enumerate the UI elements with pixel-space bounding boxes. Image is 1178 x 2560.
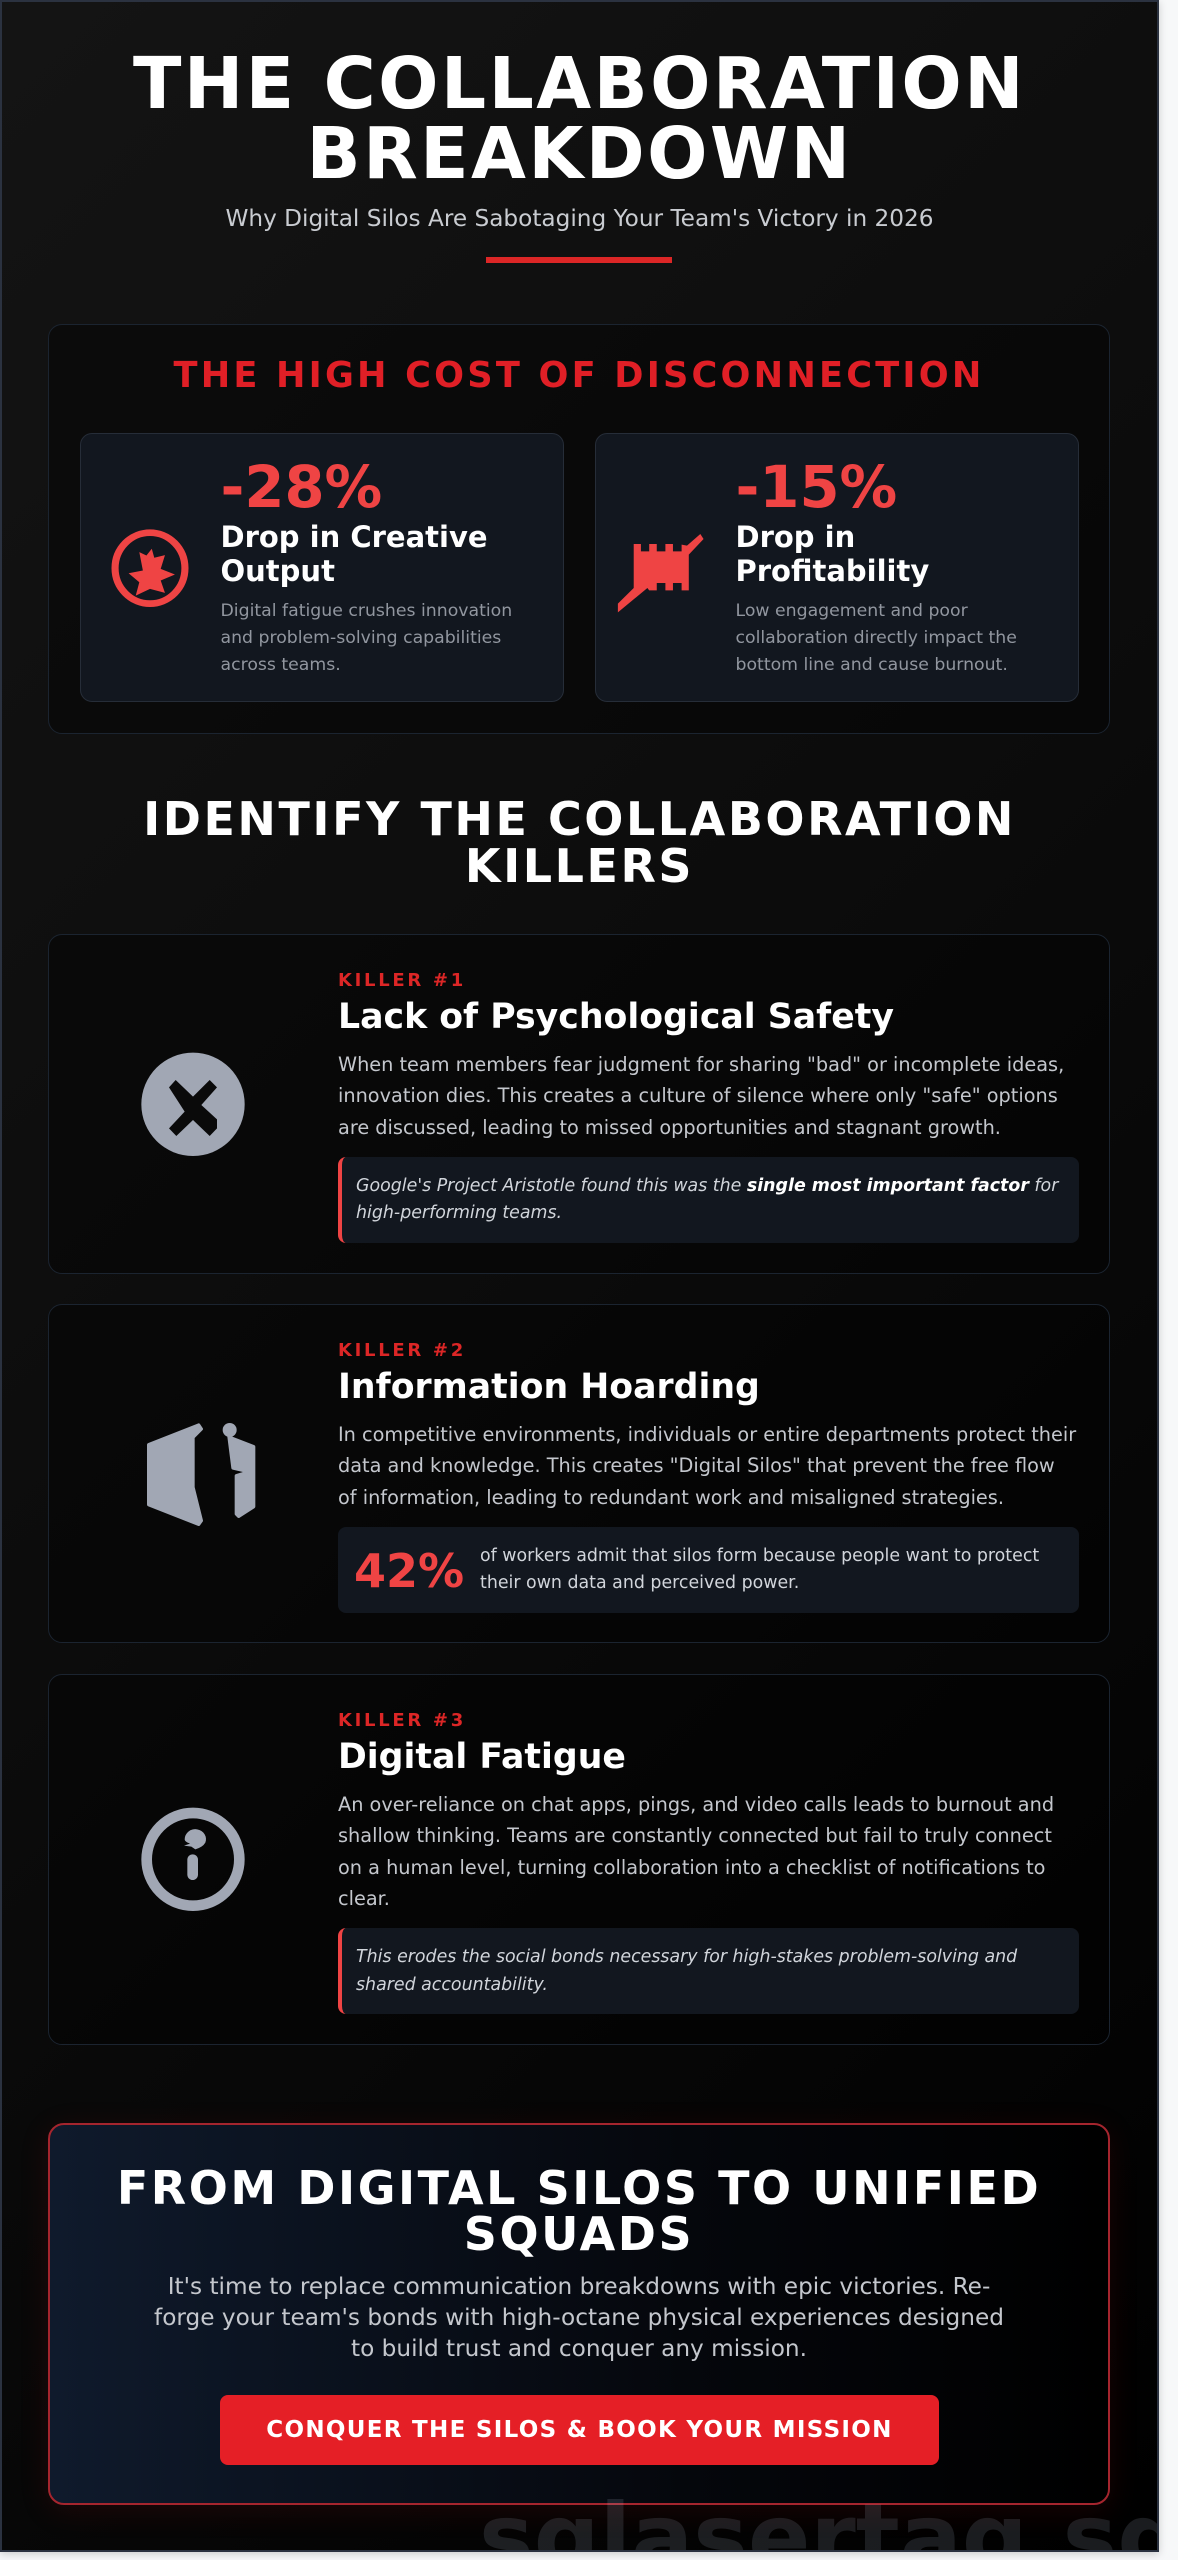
- section heading: [143, 792, 1016, 893]
- red accent bar: [486, 257, 672, 263]
- stat text: -28%: [220, 454, 382, 521]
- killer 1 text: [338, 970, 1079, 1243]
- stat text: [736, 454, 1017, 675]
- stat text: [220, 454, 512, 675]
- panel: killer 3: [48, 1674, 1110, 2045]
- stat card: profitability: [595, 433, 1079, 702]
- quote callout: high-performing teams.: [356, 1203, 562, 1223]
- cta button: CONQUER THE SILOS & BOOK YOUR MISSION: [266, 2417, 893, 2443]
- call to action panel: [48, 2123, 1110, 2505]
- killer 2 text: data and knowledge. This creates "Digital Silos" that prevent the free flow: [338, 1454, 1055, 1477]
- quote callout: [338, 1928, 1079, 2014]
- killer 3 text: on a human level, turning collaboration into a checklist of notifications to: [338, 1856, 1045, 1878]
- killer 1 text: When team members fear judgment for sharing "bad" or incomplete ideas,: [338, 1053, 1064, 1076]
- stat text: Digital fatigue crushes innovation and problem-solving capabilities across teams.: [220, 601, 512, 675]
- cta heading: FROM DIGITAL SILOS TO UNIFIED: [117, 2161, 1041, 2215]
- subtitle: Why Digital Silos Are Sabotaging Your Team's Victory in 2026: [225, 205, 934, 232]
- killer 2 text: of information, leading to redundant work and misaligned strategies.: [338, 1486, 1004, 1508]
- section heading: IDENTIFY THE COLLABORATION: [143, 792, 1016, 846]
- killer 1 text: are discussed, leading to missed opportunities and stagnant growth.: [338, 1116, 1001, 1138]
- panel: killer 2: [48, 1304, 1110, 1643]
- cta heading: [117, 2161, 1041, 2261]
- cta heading: SQUADS: [464, 2207, 694, 2261]
- killer 3 text: clear.: [338, 1887, 390, 1910]
- stat text: -15%: [736, 454, 897, 521]
- quote callout: This erodes the social bonds necessary for high-stakes problem-solving and: [356, 1947, 1017, 1967]
- quote callout: [338, 1157, 1079, 1243]
- killer 3 text: shallow thinking. Teams are constantly connected but fail to truly connect: [338, 1824, 1052, 1847]
- icon: info circle: [141, 1808, 245, 1911]
- stat text: Low engagement and poor collaboration directly impact the bottom line and cause burnout.: [736, 601, 1017, 675]
- icon: split shield: [147, 1423, 256, 1526]
- panel: killer 1: [48, 934, 1110, 1274]
- killer 3 text: Digital Fatigue: [338, 1737, 626, 1777]
- quote callout: Google's Project Aristotle found this was the single most important factor for: [356, 1176, 1058, 1196]
- cta button: [220, 2395, 939, 2465]
- title: THE COLLABORATION: [133, 42, 1026, 125]
- stat text: Drop in Creative Output: [220, 520, 488, 588]
- killer 1 text: innovation dies. This creates a culture of silence where only "safe" options: [338, 1084, 1058, 1107]
- icon: crossed-out banknote: [618, 534, 704, 612]
- killer 3 text: [338, 1710, 1079, 2014]
- stat text: Drop in Profitability: [736, 520, 929, 588]
- killer 2 text: Information Hoarding: [338, 1367, 760, 1407]
- quote callout: shared accountability.: [356, 1975, 548, 1995]
- icon: x circle: [141, 1052, 245, 1156]
- title: [133, 42, 1026, 195]
- killer 2 text: In competitive environments, individuals or entire departments protect their: [338, 1423, 1076, 1446]
- cta paragraph: It's time to replace communication breakdowns with epic victories. Re-forge your team's bonds with high-octane physical experiences designed to build trust and conquer any mission.: [154, 2273, 1004, 2362]
- stat callout: 42%: [354, 1544, 464, 1598]
- killer 2 text: [338, 1340, 1079, 1613]
- panel heading: THE HIGH COST OF DISCONNECTION: [174, 355, 984, 396]
- killer 3 text: An over-reliance on chat apps, pings, and video calls leads to burnout and: [338, 1793, 1054, 1816]
- killer 2 text: KILLER #2: [338, 1340, 466, 1361]
- killer 1 text: KILLER #1: [338, 970, 466, 991]
- stat card: creative output: [80, 433, 564, 702]
- panel: high cost of disconnection: [48, 324, 1110, 734]
- icon: broken star: [112, 529, 188, 607]
- killer 1 text: Lack of Psychological Safety: [338, 997, 894, 1037]
- killer 3 text: KILLER #3: [338, 1710, 466, 1731]
- stat callout: of workers admit that silos form because people want to protect: [480, 1546, 1039, 1566]
- title: BREAKDOWN: [307, 112, 852, 195]
- section heading: KILLERS: [465, 839, 694, 893]
- stat callout: their own data and perceived power.: [480, 1573, 799, 1593]
- stat callout: [338, 1527, 1079, 1613]
